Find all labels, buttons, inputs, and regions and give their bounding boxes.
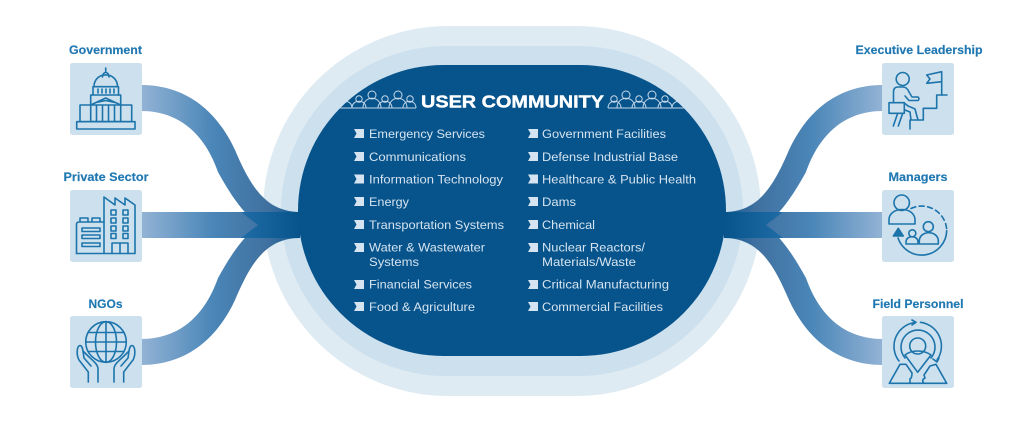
ribbon: Executive Leadership (724, 85, 883, 225)
label: Government: Government (69, 43, 142, 57)
item: Chemical (542, 218, 595, 232)
label: Executive Leadership: Executive Leadership (856, 43, 982, 57)
bullets right (528, 129, 538, 311)
item: Commercial Facilities (542, 300, 663, 314)
ribbon overlap chevron right (724, 212, 783, 238)
icon: crowd right (608, 91, 694, 108)
icon tile: Government capitol (70, 63, 142, 135)
ribbon: Government (141, 85, 300, 225)
item: Water & Wastewater (369, 240, 485, 254)
label: NGOs: NGOs (88, 297, 123, 311)
item: Healthcare & Public Health (542, 172, 696, 186)
label: Private Sector: Private Sector (64, 170, 149, 184)
item: Nuclear Reactors/ (542, 240, 646, 254)
item: Systems (369, 255, 419, 269)
ribbon overlap chevron (241, 212, 300, 238)
item: Food & Agriculture (369, 300, 475, 314)
item: Transportation Systems (369, 218, 504, 232)
icon: crowd left (330, 91, 416, 108)
label: Managers: Managers (888, 170, 948, 184)
item: Critical Manufacturing (542, 278, 669, 292)
icon tile: Private Sector buildings (70, 190, 142, 262)
item: Defense Industrial Base (542, 150, 678, 164)
right flow ribbons (724, 85, 883, 365)
ribbon: Private Sector (141, 212, 300, 238)
infographic canvas (64, 26, 982, 396)
label: Field Personnel: Field Personnel (872, 297, 964, 311)
icon tile: Managers team cycle (882, 190, 954, 262)
ribbon: Field Personnel (724, 225, 883, 365)
bullets left (354, 129, 364, 311)
inner capsule (298, 65, 726, 356)
middle capsule (281, 46, 743, 376)
item: Emergency Services (369, 127, 485, 141)
item: Dams (542, 195, 576, 209)
item: Communications (369, 150, 466, 164)
item: Government Facilities (542, 127, 666, 141)
item: Information Technology (369, 172, 504, 186)
panel: user community (298, 65, 726, 356)
item: Materials/Waste (542, 255, 636, 269)
ribbon: NGOs (141, 225, 300, 365)
heading: user community: USER COMMUNITY (421, 92, 604, 112)
icon tile: Field Personnel location pin (882, 316, 954, 388)
ribbon: Managers (724, 212, 883, 238)
icon tile: Executive Leadership climbing stairs (882, 63, 954, 135)
left flow ribbons (141, 85, 300, 365)
item: Financial Services (369, 278, 472, 292)
item: Energy (369, 195, 410, 209)
outer pale capsule (263, 26, 761, 396)
list: right column sectors (528, 127, 696, 314)
icon tile: NGOs globe and hands (70, 316, 142, 388)
list: left column sectors (354, 127, 504, 314)
